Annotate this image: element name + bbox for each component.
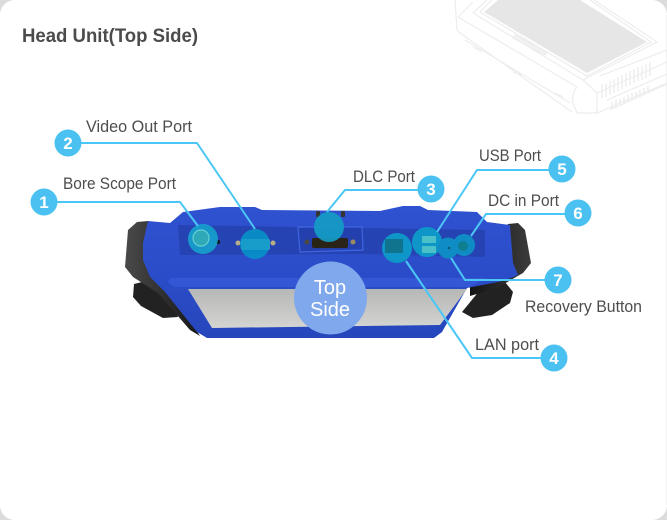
callout 6: DC in Port	[471, 191, 592, 236]
callout 7: Recovery Button: 7	[553, 271, 563, 290]
callout 5: USB Port	[437, 146, 576, 232]
screen	[188, 289, 467, 328]
bore scope port detail	[216, 240, 220, 244]
callout 4: LAN port: LAN port	[475, 335, 539, 354]
device: head unit top side	[125, 206, 531, 338]
highlight: DLC port	[314, 212, 344, 242]
highlight: DC in port	[453, 234, 475, 256]
callout 5: USB Port: USB Port	[479, 146, 541, 165]
callout 5: USB Port: 5	[557, 160, 567, 179]
callout 2: Video Out Port: 2	[63, 134, 73, 153]
highlight: bore scope port	[188, 224, 218, 254]
callout: Top Side: Side	[310, 299, 350, 321]
highlight: recovery button	[438, 238, 458, 258]
callout 7: Recovery Button: Recovery Button	[525, 297, 642, 316]
callout 3: DLC Port: DLC Port	[353, 167, 415, 186]
callout 6: DC in Port: DC in Port	[488, 191, 559, 210]
callout 2: Video Out Port: Video Out Port	[86, 117, 192, 136]
callout 4: LAN port	[406, 261, 568, 372]
callout 2: Video Out Port	[54, 117, 255, 229]
callout 1: Bore Scope Port: Bore Scope Port	[63, 174, 176, 193]
highlight: video out port	[240, 229, 270, 259]
blue housing	[143, 206, 518, 338]
rear grips	[133, 280, 513, 318]
callout 3: DLC Port: 3	[426, 180, 436, 199]
port recess	[178, 225, 485, 257]
highlight: USB port	[412, 227, 442, 257]
VGA screws and port	[236, 239, 276, 250]
callout 6: DC in Port: 6	[573, 204, 583, 223]
callout: Top Side	[294, 262, 367, 334]
callout 1: Bore Scope Port	[30, 174, 198, 226]
bezel band	[168, 278, 487, 287]
callout: Top Side: Top	[314, 277, 346, 299]
title: Head Unit(Top Side)	[22, 26, 198, 47]
callout 7: Recovery Button	[451, 258, 642, 316]
callout 3: DLC Port	[327, 167, 444, 212]
left bumper	[125, 221, 200, 336]
ghost device illustration	[455, 0, 667, 113]
callout 4: LAN port: 4	[549, 349, 559, 368]
right bumper	[470, 223, 531, 296]
highlight: LAN port	[382, 233, 412, 263]
DLC recess and connector	[298, 211, 363, 252]
callout 1: Bore Scope Port: 1	[39, 193, 49, 212]
